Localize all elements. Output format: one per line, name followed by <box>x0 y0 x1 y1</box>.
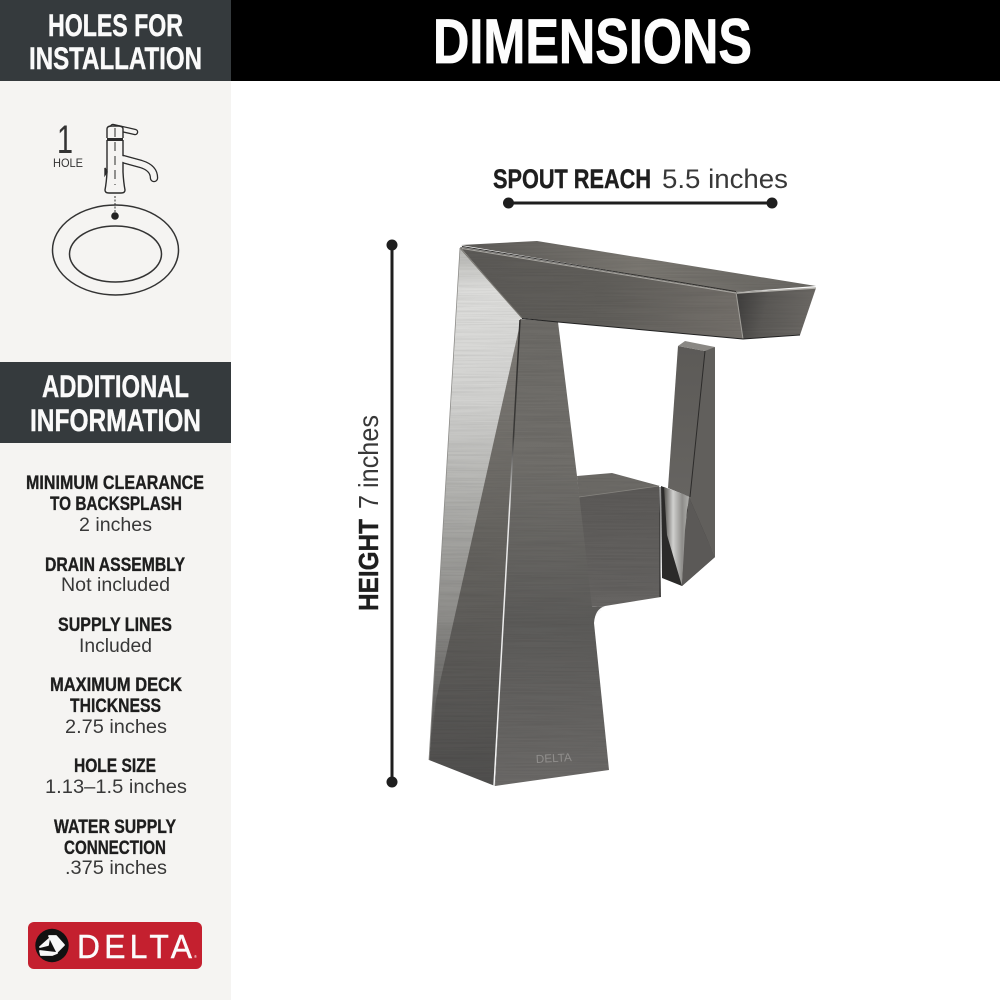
header: additional information <box>0 362 231 443</box>
label: height <box>353 415 384 611</box>
hole count: 1 <box>57 118 73 162</box>
label: spout reach: 5.5 inches <box>662 164 788 194</box>
label: spout reach <box>493 164 788 194</box>
faucet: spout front <box>460 247 743 339</box>
faucet: spout top <box>461 241 816 292</box>
spec: maximum deck thickness: 2.75 inches <box>65 717 167 738</box>
logo: Delta: ® <box>194 954 197 959</box>
spec: minimum clearance: 2 inches <box>79 515 152 536</box>
spec: maximum deck thickness: MAXIMUM DECK <box>50 674 182 696</box>
spec: water supply connection: .375 inches <box>65 858 167 879</box>
spec: maximum deck thickness: THICKNESS <box>70 695 161 717</box>
heading: additional information: ADDITIONAL <box>42 368 189 404</box>
faucet photo <box>425 238 820 790</box>
icon: sink basin <box>52 196 178 295</box>
spec: hole size: 1.13–1.5 inches <box>45 777 187 798</box>
spec: supply lines <box>58 614 172 657</box>
spec: minimum clearance: TO BACKSPLASH <box>50 493 182 515</box>
spec: supply lines: SUPPLY LINES <box>58 614 172 636</box>
spec: maximum deck thickness <box>50 674 182 738</box>
hole count: HOLE <box>53 156 83 170</box>
faucet: handle <box>661 341 715 586</box>
faucet: spout end <box>736 288 816 339</box>
spec: supply lines: Included <box>79 636 152 657</box>
faucet: side box <box>577 473 661 607</box>
spec: minimum clearance <box>26 472 204 536</box>
icon: faucet <box>105 126 154 193</box>
spec: water supply connection: WATER SUPPLY <box>54 816 176 838</box>
heading: additional information: INFORMATION <box>30 402 201 438</box>
spec: drain assembly: DRAIN ASSEMBLY <box>45 554 185 576</box>
arrow: spout reach line <box>503 198 778 208</box>
spec: drain assembly: Not included <box>61 575 170 596</box>
faucet: engraved logo: DELTA <box>536 752 572 766</box>
icon: one hole faucet and sink <box>52 118 178 295</box>
heading: holes for installation: HOLES FOR <box>48 7 183 43</box>
spec: minimum clearance: MINIMUM CLEARANCE <box>26 472 204 494</box>
sidebar background <box>0 0 231 1000</box>
brushed metal texture <box>436 246 766 652</box>
header: holes for installation <box>0 0 231 81</box>
spec: drain assembly <box>45 554 185 596</box>
heading: additional information <box>30 368 201 438</box>
dimension: spout reach <box>493 164 788 208</box>
logo: Delta: DELTA <box>77 927 192 965</box>
heading: holes for installation <box>29 7 202 76</box>
hole count <box>53 118 83 170</box>
dimension: height <box>353 240 398 788</box>
spec: hole size: HOLE SIZE <box>74 755 156 777</box>
header: dimensions <box>231 0 1000 81</box>
heading: dimensions: DIMENSIONS <box>433 7 752 77</box>
spec: water supply connection: CONNECTION <box>64 837 166 859</box>
heading: holes for installation: INSTALLATION <box>29 40 202 76</box>
faucet: dark triangular face <box>429 320 521 786</box>
spec: water supply connection <box>54 816 176 879</box>
faucet: front face <box>495 319 609 786</box>
arrow: height line <box>386 240 398 788</box>
logo: Delta <box>28 922 202 969</box>
label: height: 7 inches <box>353 415 384 509</box>
label: spout reach: SPOUT REACH <box>493 164 651 194</box>
spec: hole size <box>45 755 187 798</box>
faucet: left polished face <box>429 248 522 760</box>
faucet: highlight edges <box>429 246 816 786</box>
label: height: HEIGHT <box>353 519 384 611</box>
